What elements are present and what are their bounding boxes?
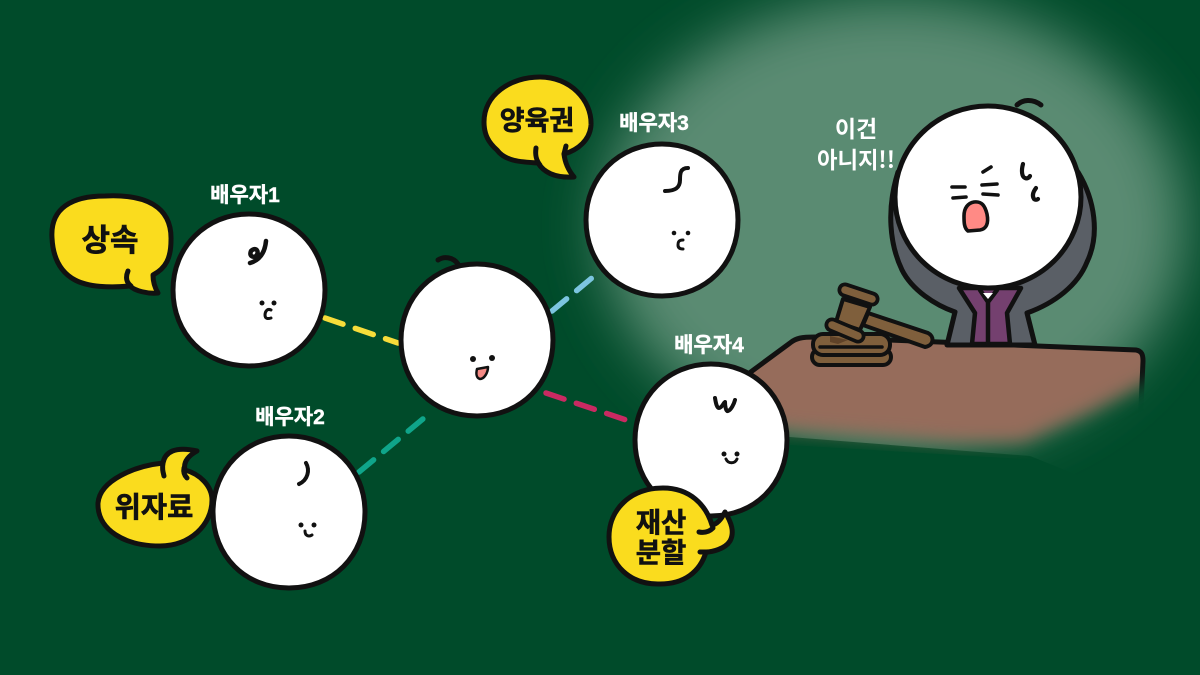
judge robe [891, 172, 1094, 345]
spouse 2 label: 배우자2 [255, 406, 325, 429]
gavel head [836, 299, 870, 330]
bubble: property division [609, 488, 732, 584]
spouse 1 label: 배우자1 [210, 184, 280, 207]
judge speech: 아니지!! [817, 141, 895, 175]
spouse 3 label: 배우자3 [619, 112, 689, 135]
dashed link: spouse 3 [552, 277, 593, 311]
judge desk [748, 337, 1143, 460]
dashed link: spouse 1 [325, 318, 398, 343]
judge speech [817, 110, 895, 175]
dashed link: spouse 2 [359, 413, 430, 472]
gavel base [812, 349, 891, 365]
gavel [812, 290, 933, 365]
dashed link: spouse 4 [546, 393, 635, 423]
judge speech: 이건 [835, 110, 877, 144]
spouse 4 label: 배우자4 [674, 334, 744, 357]
bubble: custody: 양육권 [500, 106, 574, 136]
spouse 2 [213, 436, 365, 588]
judge collar [980, 290, 997, 344]
bubble: custody [484, 77, 591, 177]
bubble: alimony: 위자료 [115, 492, 193, 524]
center person [401, 258, 553, 416]
spouse 3 [586, 144, 738, 296]
bubble: inheritance: 상속 [81, 223, 139, 258]
judge head [895, 106, 1081, 288]
judge [891, 100, 1094, 345]
gavel handle [863, 313, 933, 347]
judge face [952, 164, 1038, 231]
bubble: property division: 분할 [636, 537, 686, 568]
bubble: property division: 재산 [636, 507, 686, 538]
judge hair [1017, 100, 1041, 105]
bubble: inheritance [52, 196, 171, 293]
bubble: alimony [98, 449, 212, 546]
spotlight [601, 0, 1185, 454]
spouse 4 [635, 364, 787, 516]
judge purple stole [959, 288, 1021, 344]
spouse 1 [173, 214, 325, 366]
